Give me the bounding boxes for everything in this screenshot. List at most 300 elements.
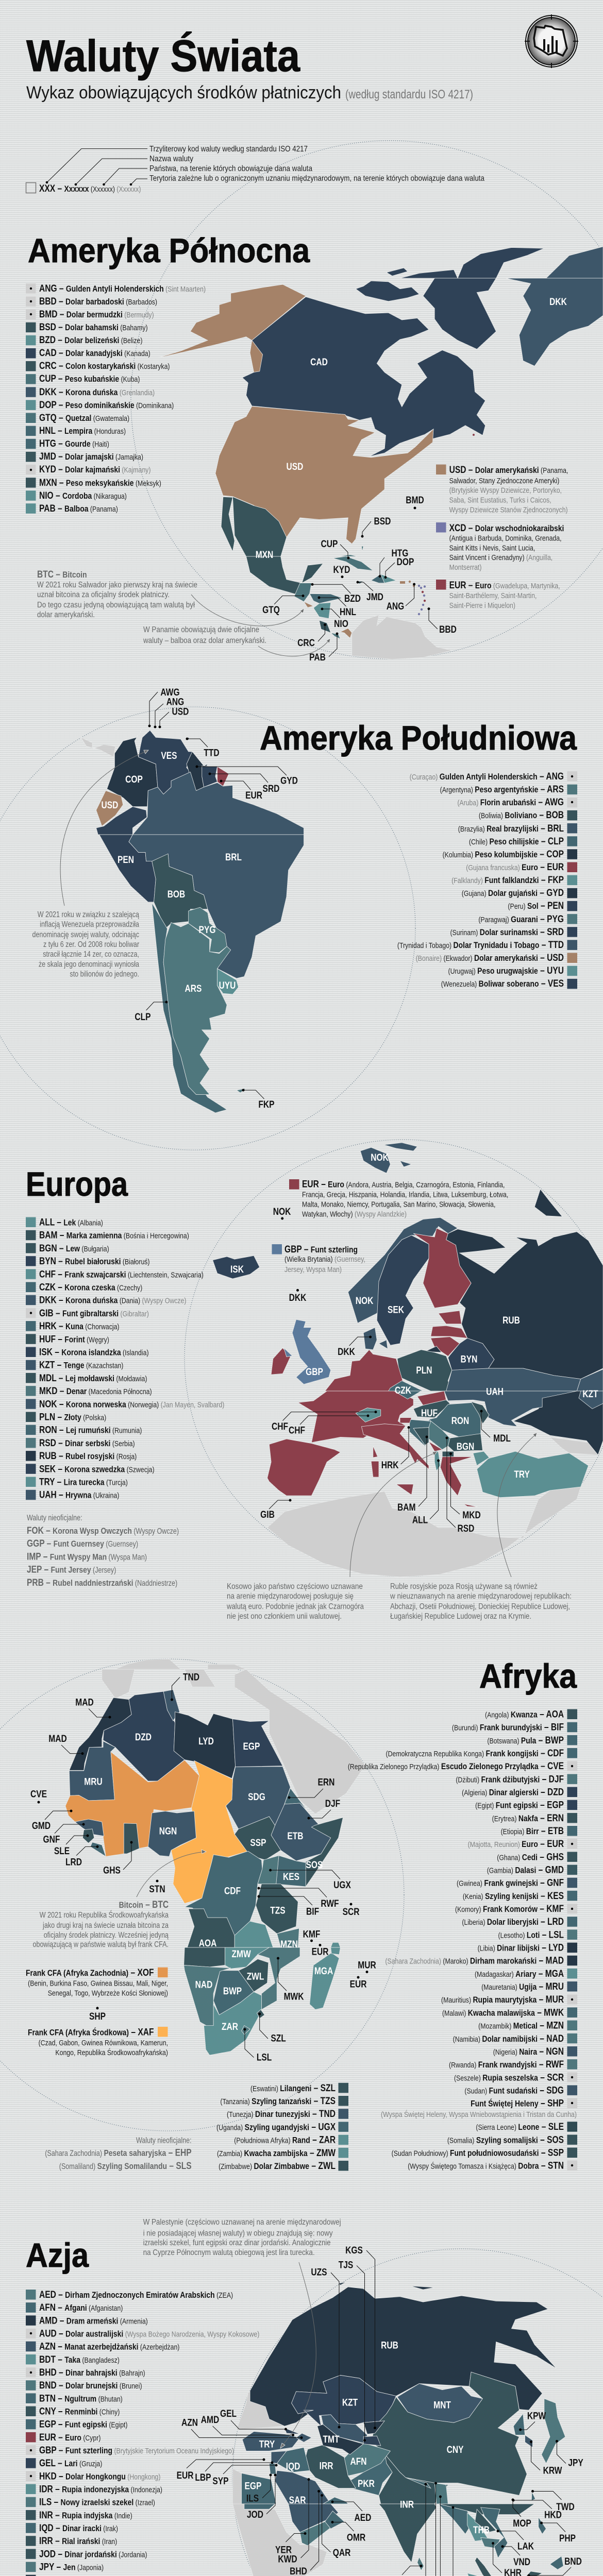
callouts: Europe currencies: MDL <box>493 1433 511 1444</box>
legend: XAF <box>28 2026 168 2057</box>
legend: XAF: (Czad, Gabon, Gwinea Równikowa, Kamerun, <box>39 2039 168 2047</box>
GMD: (Gambia) Dalasi – GMD <box>487 1864 564 1875</box>
Caribbean islets <box>400 434 475 615</box>
map labels: North America: CAD <box>310 357 328 367</box>
callouts: Asia currencies: JOD <box>247 2509 263 2520</box>
legend: how to read entries: XXX – Xxxxxx (Xxxxxx) (Xxxxxx) <box>39 183 141 194</box>
BTN: BTN – Ngultrum (Bhutan) <box>39 2393 123 2404</box>
callouts: Europe currencies: RSD <box>458 1523 474 1534</box>
map labels: North America: DKK <box>549 296 567 307</box>
note: Venezuela denomination <box>32 910 139 978</box>
callouts: Asia currencies: AMD <box>201 2414 219 2425</box>
note: Bitcoin in Salvador: BTC – Bitcoin <box>37 569 87 580</box>
callouts: Africa currencies: MAD <box>48 1733 67 1744</box>
legend: XAF: Frank CFA (Afryka Środkowa) – XAF <box>28 2026 154 2038</box>
legend: GBP territories: (Wielka Brytania) (Guernsey, <box>284 1255 365 1263</box>
subtitle: Wykaz obowiązujących środków płatniczych <box>26 83 341 103</box>
KGS <box>26 2574 112 2576</box>
callouts: North America currencies: HNL <box>340 606 356 617</box>
legend: EUR territories: Saint-Pierre i Miquelon) <box>449 601 515 609</box>
list: unofficial African currencies: (Somaliland) Szyling Somalilandu – SLS <box>59 2160 192 2171</box>
map labels: South America: PEN <box>118 854 134 865</box>
UYU: (Urugwaj) Peso urugwajskie – UYU <box>448 965 564 976</box>
SLE: (Sierra Leone) Leone – SLE <box>476 2121 564 2132</box>
AED: AED – Dirham Zjednoczonych Emiratów Arabskich (ZEA) <box>39 2289 233 2300</box>
DJF: (Dżibuti) Frank dżibutyjski – DJF <box>456 1773 564 1785</box>
map labels: Europe: CZK <box>395 1385 411 1396</box>
callouts: Europe currencies: MKD <box>462 1510 481 1520</box>
note: Palestine and Northern Cyprus: i nie posiadającej własnej waluty) w obiegu znajdują się: nowy <box>143 2229 333 2238</box>
note: Bitcoin in Central African Republic: W 2021 roku Republika Środkowoafrykańska <box>40 1910 169 1919</box>
UGX: (Uganda) Szyling ugandyjski – UGX <box>216 2121 336 2132</box>
map labels: Africa: ZWL <box>247 1971 264 1982</box>
legend: how to read entries: Terytoria zależne lub o ograniczonym uznaniu międzynarodowym, na terenie których obowiązuje dana waluta <box>149 174 484 183</box>
arrow: Panama note to Panama <box>258 638 330 656</box>
callouts: North America currencies: KYD <box>333 564 350 575</box>
map labels: Africa: EGP <box>243 1741 260 1752</box>
COP: (Kolumbia) Peso kolumbijskie – COP <box>443 849 564 859</box>
ALL: ALL – Lek (Albania) <box>39 1216 103 1228</box>
map labels: Asia: SAR <box>289 2495 306 2505</box>
IDR: IDR – Rupia indonezyjska (Indonezja) <box>39 2483 162 2495</box>
map labels: Africa: MRU <box>84 1776 103 1787</box>
callouts: Asia currencies: AED <box>355 2512 371 2523</box>
callouts: Africa currencies: EUR <box>350 1978 367 1990</box>
callouts: South America currencies: AWG <box>160 687 180 698</box>
callouts: South America currencies: GYD <box>280 775 298 786</box>
MDL: MDL – Lej mołdawski (Mołdawia) <box>39 1372 147 1383</box>
callouts: North America currencies: BBD <box>439 624 457 635</box>
callouts: North America currencies: NIO <box>334 618 348 629</box>
callouts: Africa currencies: BIF <box>306 1906 319 1917</box>
callouts: Asia currencies: KGS <box>345 2245 363 2256</box>
GIB: GIB – Funt gibraltarski (Gibraltar) <box>39 1307 149 1318</box>
legend: EUR territories: Saint-Barthélemy, Saint-Martin, <box>449 591 537 600</box>
map: South America north <box>81 727 304 835</box>
CVE: (Republika Zielonego Przylądka) Escudo Zielonego Przylądka – CVE <box>348 1760 564 1772</box>
callouts: Europe currencies: HRK <box>381 1460 399 1470</box>
CZK: CZK – Korona czeska (Czechy) <box>39 1281 142 1293</box>
note: Russian rubles abroad: Abchazji, Osetii Południowej, Donieckiej Republice Ludowej, <box>390 1602 570 1611</box>
callouts: Asia currencies: HKD <box>544 2509 562 2520</box>
map labels: Asia: INR <box>400 2499 414 2510</box>
legend: USD countries: Saba, Sint Eustatius, Turks i Caicos, <box>449 496 551 504</box>
list: unofficial African currencies: Waluty nieoficjalne: <box>136 2136 192 2145</box>
callouts: Asia currencies: AZN <box>181 2417 198 2428</box>
note: Palestine and Northern Cyprus: W Palestynie (częściowo uznawanej na arenie międzynarodowej <box>143 2218 341 2227</box>
map: Europe north <box>213 1143 603 1391</box>
callouts: Africa currencies: MWK <box>284 1991 304 2002</box>
AMD: AMD – Dram armeński (Armenia) <box>39 2315 148 2326</box>
callouts: Africa currencies: TND <box>183 1671 199 1683</box>
CNY: CNY – Renminbi (Chiny) <box>39 2405 120 2417</box>
heading: Asia: Azja <box>26 2236 89 2274</box>
arrow: Bitcoin note to Salvador <box>191 595 304 626</box>
legend: USD countries: (Brytyjskie Wyspy Dziewicze, Portoryko, <box>449 486 562 495</box>
map labels: Europe: TRY <box>514 1469 530 1480</box>
legend: XOF <box>26 1967 168 1997</box>
callouts: Europe currencies: CHF <box>272 1421 288 1432</box>
callouts: North America currencies <box>262 495 457 663</box>
map: South America south <box>99 835 304 1113</box>
VES: (Wenezuela) Boliwar soberano – VES <box>441 978 564 989</box>
RON: RON – Lej rumuński (Rumunia) <box>39 1424 142 1435</box>
note: Venezuela denomination: W 2021 roku w związku z szalejącą <box>38 910 139 919</box>
IRR: IRR – Rial irański (Iran) <box>39 2535 117 2547</box>
MGA: (Madagaskar) Ariary – MGA <box>475 1968 564 1979</box>
map labels: Europe: SEK <box>388 1304 404 1315</box>
note: Kosovo: Kosowo jako państwo częściowo uznawane <box>227 1582 363 1591</box>
note: Palestine and Northern Cyprus <box>143 2218 341 2257</box>
JMD: JMD – Dolar jamajski (Jamajka) <box>39 451 143 462</box>
BIF: (Burundi) Frank burundyjski – BIF <box>452 1721 564 1733</box>
callouts: North America currencies: GTQ <box>262 604 280 615</box>
callouts: Africa currencies: ERN <box>318 1776 334 1788</box>
note: Bitcoin in Salvador: dolar amerykański. <box>37 611 95 619</box>
map labels: Asia: IRR <box>320 2460 333 2471</box>
map labels: Africa: MGA <box>314 1965 333 1976</box>
callouts: Africa currencies: SCR <box>343 1906 360 1917</box>
GBP: GBP – Funt szterling (Brytyjskie Terytorium Oceanu Indyjskiego) <box>39 2445 234 2455</box>
BND: BND – Dolar brunejski (Brunei) <box>39 2380 142 2391</box>
map: Europe south <box>267 1391 603 1577</box>
legend: how to read entries: Państwa, na terenie których obowiązuje dana waluta <box>149 164 312 173</box>
callouts: Africa currencies: RWF <box>321 1897 339 1909</box>
map labels: Asia: KZT <box>342 2397 358 2408</box>
map labels: Europe: BGN <box>457 1441 474 1452</box>
callouts: North America currencies: BMD <box>406 495 424 505</box>
map labels: South America: UYU <box>219 980 236 991</box>
callouts: Africa currencies: GMD <box>32 1820 51 1831</box>
SHP: Funt Świętej Heleny – SHP <box>471 2097 564 2109</box>
callouts: North America currencies: CUP <box>321 538 338 549</box>
JOD: JOD – Dinar jordański (Jordania) <box>39 2548 147 2560</box>
list: South America currencies <box>397 771 577 989</box>
callouts: North America currencies: JMD <box>366 591 383 602</box>
ERN: (Erytrea) Nakfa – ERN <box>492 1812 564 1823</box>
SSP: (Sudan Południowy) Funt południowosudański – SSP <box>392 2147 564 2158</box>
heading: North America: Ameryka Północna <box>28 231 310 269</box>
KES: (Kenia) Szyling kenijski – KES <box>463 1890 564 1901</box>
map labels: Europe: KZT <box>582 1388 598 1399</box>
note: Venezuela denomination: z tyłu 6 zer. Od 2008 roku boliwar <box>43 940 139 948</box>
legend: EUR countries in Europe: Watykan, Włochy) (Wyspy Alandzkie) <box>302 1210 407 1218</box>
USD: (Bonaire) (Ekwador) Dolar amerykański – USD <box>416 952 564 963</box>
map labels: North America <box>256 296 567 560</box>
legend: GBP territories: GBP – Funt szterling <box>284 1244 358 1255</box>
legend: EUR countries in Europe: EUR – Euro (Andora, Austria, Belgia, Czarnogóra, Estonia, Finlandia, <box>302 1178 505 1190</box>
DOP: DOP – Peso dominikańskie (Dominikana) <box>39 399 174 410</box>
ANG: (Curaçao) Gulden Antyli Holenderskich – ANG <box>410 771 564 782</box>
list: unofficial European currencies: JEP – Funt Jersey (Jersey) <box>27 1564 116 1575</box>
LRD: (Liberia) Dolar liberyjski – LRD <box>462 1916 564 1927</box>
FKP: (Falklandy) Funt falklandzki – FKP <box>451 874 564 885</box>
list: Africa currencies middle column <box>216 2082 348 2171</box>
RUB: RUB – Rubel rosyjski (Rosja) <box>39 1450 137 1461</box>
callouts: Africa currencies: SHP <box>89 2011 106 2022</box>
heading: Africa: Afryka <box>479 1657 577 1695</box>
ETB: (Etiopia) Birr – ETB <box>501 1825 564 1836</box>
map: Central America and Caribbean <box>246 556 452 659</box>
TZS: (Tanzania) Szyling tanzański – TZS <box>220 2095 336 2106</box>
map labels: Africa: SOS <box>306 1859 323 1870</box>
SZL: (Eswatini) Lilangeni – SZL <box>250 2082 336 2093</box>
PAB: PAB – Balboa (Panama) <box>39 503 118 514</box>
callouts: Africa currencies: KMF <box>303 1928 320 1940</box>
list: North America currencies <box>26 283 206 514</box>
map labels: Africa: KES <box>283 1871 299 1882</box>
LSL: (Lesotho) Loti – LSL <box>498 1929 564 1940</box>
map labels: South America: VES <box>161 750 177 761</box>
map labels: Europe: PLN <box>416 1365 432 1376</box>
CDF: (Demokratyczna Republika Konga) Frank kongijski – CDF <box>386 1748 564 1758</box>
note: Kosovo <box>226 1582 364 1621</box>
map labels: Europe: NOK <box>356 1295 374 1306</box>
callouts: Asia currencies: LAK <box>517 2540 534 2552</box>
GYD: (Gujana) Dolar gujański – GYD <box>462 887 564 898</box>
legend: EUR territories: EUR – Euro (Gwadelupa, Martynika, <box>449 580 560 590</box>
map labels: Asia: TMT <box>323 2434 340 2445</box>
note: Panama currencies: waluty – balboa oraz dolar amerykański. <box>143 636 266 645</box>
callouts: Africa currencies: LRD <box>65 1856 82 1868</box>
heading: South America: Ameryka Południowa <box>260 719 577 757</box>
MAD: (Sahara Zachodnia) (Maroko) Dirham marokański – MAD <box>385 1955 564 1966</box>
DKK: DKK – Korona duńska (Dania) (Wyspy Owcze) <box>39 1294 186 1306</box>
HRK: HRK – Kuna (Chorwacja) <box>39 1320 120 1331</box>
callouts: South America currencies: USD <box>172 706 189 717</box>
callouts: North America currencies: BSD <box>374 516 391 527</box>
map labels: Africa: SSP <box>250 1837 266 1848</box>
note: Bitcoin in Salvador: Do tego czasu jedyną obowiązującą tam walutą był <box>37 601 195 609</box>
callouts: South America currencies: CLP <box>135 1011 151 1022</box>
RSD: RSD – Dinar serbski (Serbia) <box>39 1437 135 1448</box>
BZD: BZD – Dolar belizeński (Belize) <box>39 334 142 345</box>
ILS: ILS – Nowy izraelski szekel (Izrael) <box>39 2496 155 2507</box>
heading: Europe: Europa <box>26 1165 128 1203</box>
DKK: DKK – Korona duńska (Grenlandia) <box>39 386 155 397</box>
note: Russian rubles abroad: Ruble rosyjskie poza Rosją używane są również <box>390 1582 538 1591</box>
ZWL: (Zimbabwe) Dolar Zimbabwe – ZWL <box>219 2160 336 2171</box>
IQD: IQD – Dinar iracki (Irak) <box>39 2522 118 2533</box>
MKD: MKD – Denar (Macedonia Północna) <box>39 1385 152 1396</box>
NOK: NOK – Korona norweska (Norwegia) (Jan Mayen, Svalbard) <box>39 1398 224 1410</box>
SHP <box>381 2097 577 2119</box>
BSD: BSD – Dolar bahamski (Bahamy) <box>39 321 148 332</box>
note: Venezuela denomination: inflacją Wenezuela przeprowadziła <box>40 920 139 928</box>
arrow: Ruble note to Crimea <box>497 1433 537 1577</box>
note: Kosovo: walutą euro. Podobnie jednak jak Czarnogóra <box>226 1602 364 1611</box>
callouts: Europe currencies: BAM <box>397 1502 415 1513</box>
callouts: South America currencies: FKP <box>258 1099 275 1110</box>
callouts: Africa currencies: GNF <box>43 1834 60 1845</box>
list: unofficial European currencies: Waluty nieoficjalne: <box>27 1513 82 1522</box>
CUP: CUP – Peso kubańskie (Kuba) <box>39 373 140 384</box>
NGN: (Nigeria) Naira – NGN <box>493 2045 564 2057</box>
list: unofficial African currencies <box>45 2136 192 2171</box>
callouts: North America currencies: ANG <box>387 601 404 612</box>
AOA: (Angola) Kwanza – AOA <box>485 1708 564 1720</box>
map labels: Europe: UAH <box>486 1386 504 1397</box>
callouts: Asia currencies: KPW <box>527 2410 546 2421</box>
GNF: (Gwinea) Frank gwinejski – GNF <box>457 1877 564 1888</box>
legend: how to read entries: Nazwa waluty <box>149 155 193 163</box>
list: unofficial European currencies: GGP – Funt Guernsey (Guernsey) <box>27 1538 138 1549</box>
SEK: SEK – Korona szwedzka (Szwecja) <box>39 1463 155 1475</box>
map labels: Europe: NOK <box>371 1152 389 1163</box>
HUF: HUF – Forint (Węgry) <box>39 1333 109 1345</box>
AUD: AUD – Dolar australijski (Wyspa Bożego Narodzenia, Wyspy Kokosowe) <box>39 2328 259 2339</box>
legend: XOF: Frank CFA (Afryka Zachodnia) – XOF <box>26 1967 154 1978</box>
list: Europe currencies <box>26 1216 224 1500</box>
ISK: ISK – Korona islandzka (Islandia) <box>39 1346 149 1358</box>
LYD: (Libia) Dinar libijski – LYD <box>478 1942 564 1953</box>
BMD: BMD – Dolar bermudzki (Bermudy) <box>39 309 154 319</box>
callouts: Europe currencies: DKK <box>338 1346 355 1357</box>
map labels: South America: PYG <box>199 924 215 935</box>
note: Bitcoin in Salvador: uznał bitcoina za oficjalny środek płatniczy. <box>37 590 170 599</box>
CRC: CRC – Colon kostarykański (Kostaryka) <box>39 360 170 371</box>
map labels: Asia: IQD <box>286 2461 300 2472</box>
callouts: Europe currencies <box>260 1206 511 1534</box>
note: Bitcoin in Salvador: W 2021 roku Salwador jako pierwszy kraj na świecie <box>37 581 197 589</box>
map labels: Africa: LYD <box>198 1736 214 1747</box>
map labels: Asia: MNT <box>433 2399 451 2411</box>
callouts: Asia currencies: SYP <box>212 2476 229 2486</box>
SDG: (Sudan) Funt sudański – SDG <box>464 2084 564 2096</box>
map: Africa top neighbours <box>115 1659 246 1669</box>
note: Palestine and Northern Cyprus: na Cyprze Północnym walutą obiegową jest lira turecka. <box>143 2248 315 2257</box>
legend: XCD countries: (Antigua i Barbuda, Dominika, Grenada, <box>449 534 561 543</box>
callouts: Europe currencies: DKK <box>289 1292 307 1303</box>
legend: EUR countries in Europe: Francja, Grecja, Hiszpania, Holandia, Irlandia, Litwa, Luksemburg, Łotwa, <box>302 1190 508 1199</box>
callouts: North America currencies: DOP <box>397 556 414 567</box>
callouts: South America currencies: EUR <box>245 790 262 801</box>
callouts: Asia currencies: ILS <box>246 2493 259 2504</box>
list: unofficial European currencies: IMP – Funt Wyspy Man (Wyspa Man) <box>27 1551 147 1562</box>
MRU: (Mauretania) Ugija – MRU <box>481 1981 564 1992</box>
map labels: South America: COP <box>125 774 143 785</box>
INR: INR – Rupia indyjska (Indie) <box>39 2509 132 2520</box>
map: Africa south <box>184 1947 340 2055</box>
map labels: Africa: DZD <box>135 1732 152 1742</box>
callouts: Asia currencies: KRW <box>543 2465 562 2476</box>
SOS: (Somalia) Szyling somalijski – SOS <box>447 2134 564 2145</box>
PEN: (Peru) Sol – PEN <box>508 900 564 911</box>
EUR: EUR – Euro (Cypr) <box>39 2431 100 2443</box>
map labels: Europe <box>230 1152 598 1480</box>
PYG: (Paragwaj) Guarani – PYG <box>478 913 564 924</box>
callouts: Africa currencies: SLE <box>54 1845 70 1856</box>
callouts: Asia currencies: GEL <box>220 2408 237 2419</box>
callouts: Asia currencies: YER <box>275 2544 292 2555</box>
map labels: Europe: RON <box>451 1415 469 1426</box>
list: unofficial European currencies: FOK – Korona Wysp Owczych (Wyspy Owcze) <box>27 1525 179 1536</box>
ANG: ANG – Gulden Antyli Holenderskich (Sint Maarten) <box>39 283 206 294</box>
callouts: North America currencies: HTG <box>392 548 408 558</box>
map labels: South America: BOB <box>167 889 185 900</box>
UAH: UAH – Hrywna (Ukraina) <box>39 1489 119 1500</box>
map labels: Africa: AOA <box>199 1938 217 1948</box>
KMF: (Komory) Frank Komorów – KMF <box>455 1903 564 1914</box>
note: Kosovo: nie jest ono członkiem unii walutowej. <box>227 1612 342 1621</box>
note: Bitcoin in Central African Republic: oficjalny środek płatniczy. Wcześniej jedyną <box>44 1930 169 1939</box>
callouts: South America currencies: SRD <box>263 783 279 794</box>
map labels: Africa: NAD <box>195 1979 212 1990</box>
legend: USD countries <box>436 464 568 514</box>
map labels: South America: USD <box>102 800 118 810</box>
MWK: (Malawi) Kwacha malawijska – MWK <box>442 2007 564 2018</box>
AWG: (Aruba) Florin arubański – AWG <box>457 796 564 807</box>
BBD: BBD – Dolar barbadoski (Barbados) <box>39 296 157 307</box>
map: North America top <box>387 247 603 278</box>
note: Bitcoin in Central African Republic: obowiązującą w państwie walutą był frank CFA. <box>33 1940 169 1948</box>
legend: EUR countries in Europe: Malta, Monako, Niemcy, Portugalia, San Marino, Słowacja, Słowenia, <box>302 1200 495 1209</box>
legend: XCD countries: Saint Kitts i Nevis, Saint Lucia, <box>449 544 535 552</box>
legend: XAF: Kongo, Republika Środkowoafrykańska) <box>55 2047 168 2057</box>
callouts: Africa currencies: EUR <box>312 1946 329 1957</box>
map labels: Europe: HUF <box>421 1408 438 1418</box>
list: Africa currencies right column <box>348 1708 577 2171</box>
TND: (Tunezja) Dinar tunezyjski – TND <box>227 2108 336 2120</box>
GEL: GEL – Lari (Gruzja) <box>39 2458 102 2469</box>
JPY: JPY – Jen (Japonia) <box>39 2561 104 2572</box>
callouts: Africa currencies: DJF <box>325 1798 340 1809</box>
map labels: Asia: EGP <box>245 2480 261 2492</box>
callouts: Asia currencies: MOP <box>513 2518 531 2529</box>
legend: USD countries: Salwador, Stany Zjednoczone Ameryki) <box>449 477 559 485</box>
EGP: EGP – Funt egipski (Egipt) <box>39 2418 128 2430</box>
title: Waluty Świata <box>26 31 300 81</box>
GTQ: GTQ – Quetzal (Gwatemala) <box>39 412 129 423</box>
STN: (Wyspy Świętego Tomasza i Książęca) Dobra – STN <box>408 2160 564 2171</box>
map labels: Africa: SDG <box>248 1791 265 1802</box>
TTD: (Trynidad i Tobago) Dolar Trynidadu i Tobago – TTD <box>397 939 564 950</box>
legend: XOF: Senegal, Togo, Wybrzeże Kości Słoniowej) <box>48 1989 168 1997</box>
callouts: Africa currencies: LSL <box>257 2052 272 2063</box>
KYD: KYD – Dolar kajmański (Kajmany) <box>39 464 150 474</box>
map labels: North America: MXN <box>256 549 273 560</box>
note: Venezuela denomination: sto bilionów do jednego. <box>70 969 139 978</box>
callouts: Europe currencies: CHF <box>289 1425 305 1436</box>
NAD: (Namibia) Dolar namibijski – NAD <box>453 2032 564 2044</box>
callouts: South America currencies <box>135 687 298 1110</box>
callouts: North America currencies: BZD <box>344 593 361 604</box>
map labels: Europe: GBP <box>306 1366 323 1377</box>
MZN: (Mozambik) Metical – MZN <box>478 2020 564 2031</box>
DZD: (Algieria) Dinar algierski – DZD <box>462 1786 564 1798</box>
EUR: (Gujana francuska) Euro – EUR <box>466 861 564 872</box>
BYN: BYN – Rubel białoruski (Białoruś) <box>39 1256 150 1266</box>
callouts: Africa currencies: MAD <box>75 1697 94 1708</box>
map: Africa north <box>65 1669 365 1947</box>
legend: how to read entries: Trzyliterowy kod waluty według standardu ISO 4217 <box>149 145 308 154</box>
BRL: (Brazylia) Real brazylijski – BRL <box>458 823 564 834</box>
legend: XOF: (Benin, Burkina Faso, Gwinea Bissau, Mali, Niger, <box>28 1979 168 1988</box>
callouts: Africa currencies: UGX <box>333 1879 351 1890</box>
note: Venezuela denomination: że skala jego denominacji wyniosła <box>39 959 139 969</box>
note: Venezuela denomination: stracił łącznie 14 zer, co oznacza, <box>43 950 139 958</box>
note: Bitcoin in Central African Republic: Bitcoin – BTC <box>119 1899 169 1910</box>
map: North America main <box>156 278 603 556</box>
map labels: Europe: ISK <box>230 1264 244 1275</box>
callouts: Africa currencies: CVE <box>30 1788 47 1800</box>
ZMW: (Zambia) Kwacha zambijska – ZMW <box>217 2147 336 2158</box>
PLN: PLN – Złoty (Polska) <box>39 1411 106 1422</box>
note: Bitcoin in Salvador <box>37 569 197 619</box>
callouts: Africa currencies: MUR <box>358 1959 376 1971</box>
legend: USD countries: USD – Dolar amerykański (Panama, <box>449 464 568 475</box>
list: unofficial European currencies <box>27 1513 179 1588</box>
